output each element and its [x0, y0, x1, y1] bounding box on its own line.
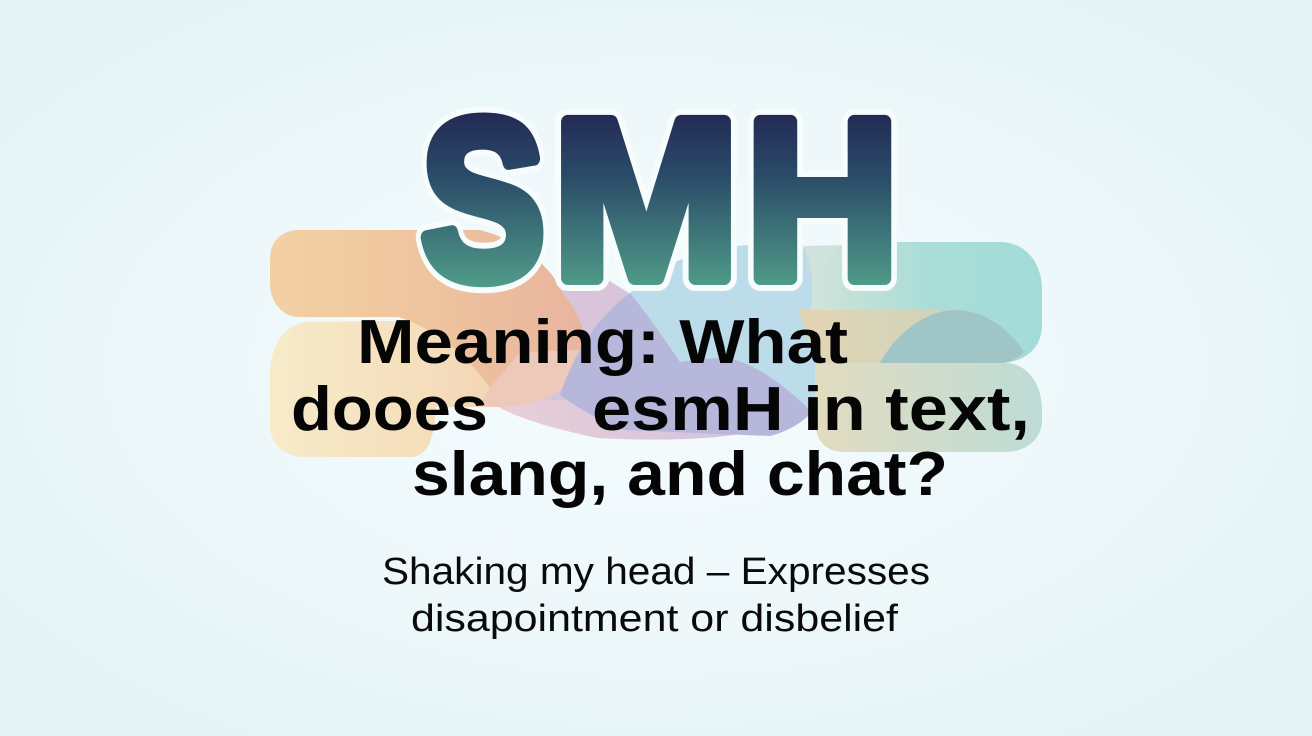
title outline — [421, 74, 899, 327]
title fill: M — [553, 74, 739, 327]
shape: lilac upper lobe — [540, 278, 640, 400]
subtitle line 1: Shaking my head – Expresses — [382, 551, 930, 593]
title outline: H — [746, 74, 899, 327]
shape: salmon petal — [480, 350, 586, 407]
shape: sage block right — [815, 363, 1042, 452]
heading line 3: slang, and chat? — [412, 440, 948, 509]
decorative pastel shapes — [270, 230, 1042, 457]
shape: blue circle — [630, 244, 829, 425]
shape: dark arc overlap — [880, 310, 1024, 363]
title fill: H — [746, 74, 899, 327]
heading: meaning question — [291, 308, 1030, 509]
subtitle: definition — [382, 551, 930, 640]
shape: cream block left — [270, 320, 520, 457]
title fill: S — [421, 74, 545, 327]
shape: orange block left — [270, 230, 586, 388]
title outline: S — [421, 74, 545, 327]
heading line 2 right: esmH in text, — [592, 375, 1030, 444]
title: SMH — [421, 74, 899, 327]
shape: pale green sliver — [803, 245, 843, 310]
title outline: M — [553, 74, 739, 327]
shape: beige petal — [798, 310, 1022, 363]
shape: lilac lower band — [495, 380, 790, 440]
heading line 2 left: dooes — [291, 375, 488, 444]
shape: purple overlap — [560, 293, 812, 436]
title fill — [421, 74, 899, 327]
heading line 1: Meaning: What — [357, 308, 848, 377]
subtitle line 2: disapointment or disbelief — [411, 598, 898, 640]
shape: teal block right — [817, 242, 1042, 363]
